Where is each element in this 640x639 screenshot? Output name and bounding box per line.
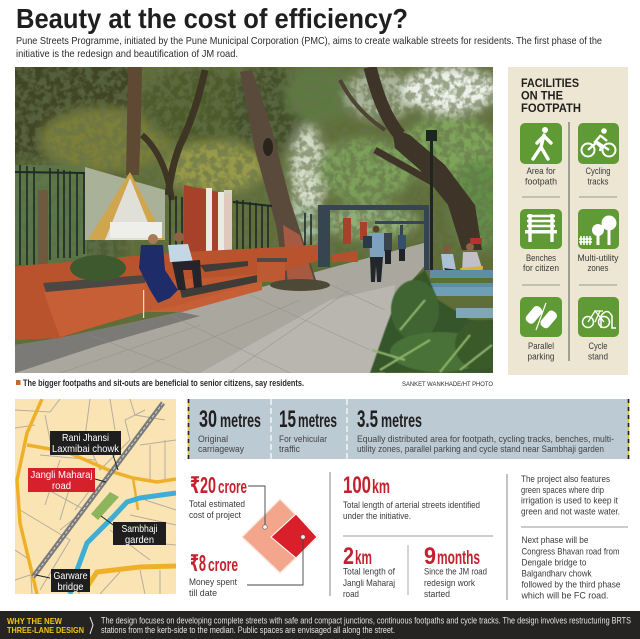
icon: cycle stand [578,297,619,337]
icon: pedestrian [520,123,562,164]
foliage texture [15,67,493,257]
text: next phase note: Congress Bhavan road from [522,546,620,558]
map of Jangli Maharaj road [15,399,176,594]
label: benches for citizen: for citizen [523,263,559,274]
label: benches for citizen: Benches [526,253,556,264]
stat: 9 months: redesign work [424,578,475,589]
label: parallel parking [528,341,554,362]
stat: 2 km: km [355,548,372,569]
stat: 15 metres: 15 [279,406,296,433]
stat: 3.5 metres: utility zones, parallel parking and cycle stand near Sambhaji garden [357,444,604,454]
stat: 2 km: road [343,589,359,600]
map label: Garware bridge [51,569,90,593]
label: parallel parking: parking [528,352,554,362]
bar text [101,616,631,635]
text: green spaces note: green spaces where drip [521,485,604,496]
panel heading: FACILITIES [521,78,579,90]
stat: 20 crore estimated cost: cost of project [189,510,241,521]
icon: trees and fence [578,209,619,249]
tree trunks [126,67,142,175]
map label: Jangli Maharaj road: road [52,480,71,492]
map label: Rani Jhansi Laxmibai chowk [50,431,121,455]
map label: Sambhaji garden: Sambhaji [122,523,158,535]
stat: 9 months [424,543,487,600]
stat: 2 km: 2 [343,543,354,570]
stat: 9 months: 9 [424,543,436,570]
stat: 2 km [343,543,395,600]
text: next phase note: Next phase will be [522,535,588,546]
text: green spaces note: green and not waste water. [521,506,620,518]
label: cycling tracks: tracks [588,176,609,188]
stat: 15 metres: traffic [279,444,300,454]
stat: 30 metres: Original [198,434,228,444]
stat: 9 months: Since the JM road [424,566,487,578]
stat: 2 km: Jangli Maharaj [343,578,395,589]
chart: nested diamonds cost vs spent [242,486,318,585]
panel heading: FOOTPATH [521,103,581,115]
text: green spaces note: The project also features [521,474,610,485]
stat: 8 crore spent: crore [208,555,238,575]
stat: 30 metres: 30 [199,406,217,433]
panel: facilities on the footpath [508,67,628,375]
stat: 3.5 metres: 3.5 [357,406,378,433]
photo: JM road footpath with seating, trees and walkers [5,57,510,373]
stat: 100 km: km [372,477,390,498]
label: area for footpath [525,166,557,188]
stat: 20 crore estimated cost: ₹20 [190,472,216,498]
women on bench and benches [430,238,493,309]
map label: Sambhaji garden: garden [125,534,154,546]
stat: 3.5 metres [357,406,614,454]
billboard [85,167,165,240]
icon: parallel parking [520,297,562,337]
map label: Garware bridge: Garware [54,570,88,582]
fence [15,165,87,265]
label: multi-utility zones: zones [588,263,609,274]
photo caption: The bigger footpaths and sit-outs are beneficial to senior citizens, say residents. [23,378,304,388]
orange walls and seats [15,245,320,340]
red gate columns [184,185,232,255]
stat: 15 metres: metres [298,411,337,432]
label: multi-utility zones [578,253,619,274]
stat: 30 metres: carriageway [198,444,244,454]
label: benches for citizen [523,253,559,274]
label: cycle stand [588,341,608,362]
stat: 100 km: 100 [343,472,371,499]
photo credit: SANKET WANKHADE/HT PHOTO [402,381,493,388]
stat: 8 crore spent: Money spent [189,577,237,588]
right side plants [370,270,505,373]
stat: 3.5 metres: metres [381,411,422,432]
text: next phase note: followed by the third phase [522,580,620,590]
stat: 8 crore spent: till date [189,588,217,599]
label: area for footpath: Area for [526,166,556,177]
map label: Rani Jhansi Laxmibai chowk: Rani Jhansi [62,432,109,444]
bar heading [7,616,84,635]
map label: Jangli Maharaj road: Jangli Maharaj [30,469,92,481]
icon: cyclist [578,123,619,164]
stat: 3.5 metres: Equally distributed area for footpath, cycling tracks, benches, multi- [357,434,614,444]
panel: road width stats [188,399,629,459]
bar heading: WHY THE NEW [7,616,63,626]
panel heading: ON THE [521,90,563,102]
text: next phase note: which will be FC road. [521,590,608,602]
map label: Jangli Maharaj road [28,468,95,492]
label: cycle stand: stand [588,352,608,362]
stat: 15 metres: For vehicular [279,434,327,444]
stat: 100 km [343,472,480,522]
label: cycling tracks [586,166,610,188]
label: parallel parking: Parallel [528,341,554,352]
stat: 30 metres: metres [220,411,261,432]
text: next phase note: Balgandharv chowk [522,568,592,580]
label: cycle stand: Cycle [588,341,608,352]
map label: Sambhaji garden [113,522,166,546]
label: area for footpath: footpath [525,176,557,188]
text: green spaces note [521,474,620,518]
label: multi-utility zones: Multi-utility [578,253,619,264]
stat: 20 crore estimated cost: crore [218,477,247,497]
text: next phase note: Dengale bridge to [522,558,586,568]
text: green spaces note: irrigation is used to keep it [521,496,618,506]
stat: 8 crore spent: ₹8 [190,550,206,576]
icon: bench [520,209,562,249]
seated couple [139,232,202,318]
stat: 15 metres [279,406,337,454]
stat: 2 km: Total length of [343,566,395,578]
bar text: stations from the kerb-side to the median. Public spaces are envisaged all along the street. [101,625,395,635]
stat: 30 metres [198,406,261,454]
ground [15,243,428,373]
stat: 20 crore estimated cost: Total estimated [189,499,245,510]
title: Beauty at the cost of efficiency? [16,3,408,34]
dark steel gates [318,205,429,270]
bottom bar: why the new three-lane design [0,611,640,639]
panel heading [521,78,581,115]
bar heading: THREE-LANE DESIGN [7,625,84,635]
walkers on the footpath [363,226,406,282]
text: next phase note [521,535,620,602]
stat: 100 km: Total length of arterial streets identified [343,500,480,511]
stat: 100 km: under the initiative. [343,511,411,522]
map label: Garware bridge: bridge [58,581,84,593]
label: cycling tracks: Cycling [586,166,610,177]
lamp post [426,130,437,273]
map label: Rani Jhansi Laxmibai chowk: Laxmibai chowk [52,443,120,455]
stat: 20 crore estimated cost [189,472,247,521]
intro text: initiative is the redesign and beautification of JM road. [16,48,238,60]
icon: chevron [90,617,93,634]
stat: 9 months: months [437,548,480,569]
stat: 8 crore spent [189,550,238,599]
intro text [16,35,602,60]
stat: 9 months: started [424,589,450,600]
